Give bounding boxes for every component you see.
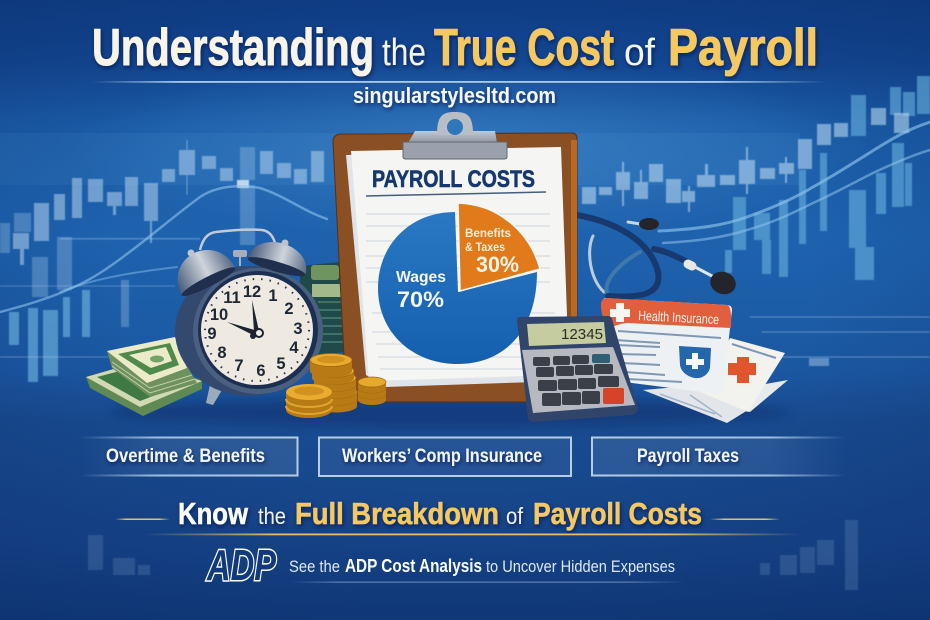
title: Payroll: [668, 19, 818, 77]
coins tall stack: [310, 354, 357, 412]
health insurance card: [601, 298, 732, 394]
clock bells: [167, 240, 237, 300]
clock numerals: 4: [289, 339, 299, 357]
paper sheets: [346, 150, 568, 387]
clock numerals: 5: [276, 355, 286, 373]
card shield: [679, 346, 711, 378]
clock numerals: 1: [268, 287, 278, 305]
clock numerals: 6: [256, 362, 266, 380]
box: payroll taxes: Payroll Taxes: [637, 446, 739, 467]
clock numerals: 12: [243, 283, 261, 301]
clock numerals: 7: [234, 357, 244, 375]
calculator: 12345: [561, 326, 603, 343]
website url: singularstylesltd.com: [353, 83, 556, 108]
subheading: the: [258, 503, 286, 529]
coins front stack: [286, 384, 332, 418]
clock body: [175, 266, 323, 396]
clipboard heading: PAYROLL COSTS: [372, 166, 535, 193]
subheading: Full Breakdown: [295, 496, 499, 531]
wages label: Wages: [396, 269, 446, 286]
card text lines: [615, 331, 721, 382]
clock numerals: 3: [293, 320, 303, 338]
call to action: to Uncover Hidden Expenses: [486, 557, 675, 576]
wages slice: [378, 212, 537, 364]
title: True Cost: [434, 19, 614, 77]
box: overtime and benefits: [80, 438, 298, 476]
alarm clock: [167, 230, 323, 405]
callout boxes: [80, 438, 846, 476]
calculator display: [527, 322, 606, 346]
stethoscope: [577, 215, 739, 298]
earpiece upper: [639, 218, 659, 230]
benefits slice: [458, 203, 540, 291]
clipboard board: [333, 133, 577, 402]
box: workers comp insurance: [319, 438, 571, 476]
candlestick chart: left: [0, 140, 324, 382]
box: overtime and benefits: Overtime & Benefits: [106, 446, 265, 467]
clock handle: [200, 230, 275, 250]
money stack front: [86, 337, 202, 416]
gold coins: [286, 354, 386, 418]
pie chart: 30%: [476, 252, 519, 277]
clock numerals: 2: [284, 300, 294, 318]
subheading: Payroll Costs: [533, 496, 702, 531]
call to action: ADP Cost Analysis: [345, 556, 482, 576]
earpiece lower: [707, 268, 739, 298]
trend lines: [0, 122, 930, 312]
paper ruled lines: [366, 214, 555, 369]
ADP logo: ADP: [206, 541, 276, 590]
candlestick chart: right: [582, 76, 930, 366]
clock numerals: 9: [207, 325, 217, 343]
lower background candles: [88, 520, 858, 590]
coins small stack: [358, 377, 386, 405]
card cross: [610, 303, 630, 322]
subheading: of: [506, 503, 524, 529]
title: of: [624, 32, 655, 74]
subheading: Know: [178, 496, 249, 531]
clock numerals: 10: [210, 306, 228, 324]
clipboard: [333, 112, 577, 402]
floor shadow: [110, 398, 790, 426]
red cross: [728, 357, 756, 383]
title underline: [92, 81, 827, 83]
call to action: [289, 556, 685, 583]
clock foot: [206, 380, 225, 405]
clock numerals: 8: [217, 344, 227, 362]
benefits label: Benefits: [465, 226, 511, 240]
pie chart: & Taxes: [465, 240, 505, 254]
clock numerals: [207, 283, 303, 380]
money stack behind clock: [300, 262, 346, 356]
subheading: [115, 496, 800, 535]
title: Understanding: [92, 19, 374, 77]
pie chart: 70%: [397, 287, 444, 312]
pie chart: [378, 203, 540, 364]
calculator: [517, 316, 638, 422]
card header: [601, 298, 731, 328]
title: [92, 19, 818, 77]
call to action: See the: [289, 557, 340, 576]
clock hands: [227, 300, 263, 339]
card title: Health Insurance: [638, 308, 720, 327]
insurance papers: [643, 338, 788, 423]
title: the: [382, 32, 426, 74]
clipboard clip: [403, 112, 507, 159]
clock numerals: 11: [223, 289, 241, 307]
box: payroll taxes: [591, 438, 846, 476]
box: workers comp insurance: Workers’ Comp Insurance: [342, 446, 542, 467]
clock face: [201, 275, 313, 385]
calculator keys: [533, 354, 624, 406]
